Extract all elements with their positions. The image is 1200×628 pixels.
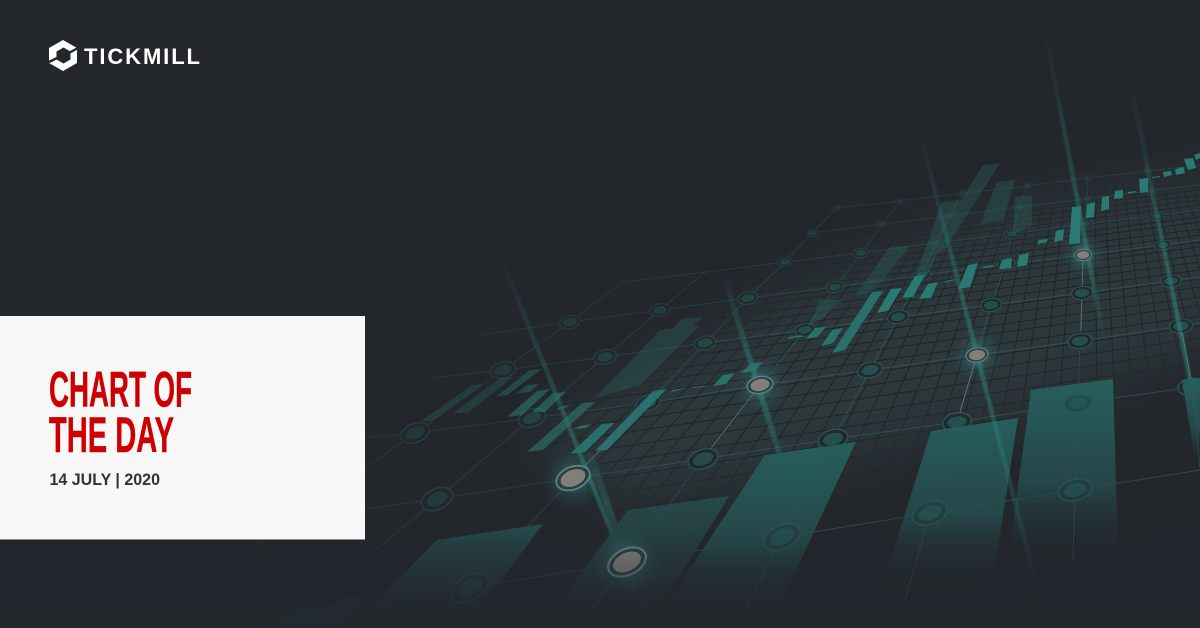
ghost candles [595,163,1032,398]
large foreground bars [240,378,1200,628]
nodes row E [558,239,1171,331]
logo wordmark: TICKMILL [84,44,200,69]
nodes row B [418,377,1200,515]
column and row lines [349,164,1200,614]
middle candles [570,291,883,454]
beam over bars [918,125,1040,600]
candlesticks [420,153,1200,454]
nodes row D [488,274,1182,381]
glowing nodes [539,231,1107,600]
heading: THE DAY [49,407,174,463]
nodes upper rows [777,167,1164,268]
network of grid lines and nodes [349,164,1200,614]
logo icon: hexagon [49,40,77,71]
nodes row C [398,318,1193,447]
heading: CHART OF [49,362,192,418]
bottom fade [0,530,1200,628]
faded left candles [420,377,513,422]
heading [49,362,192,463]
right candles [877,288,902,313]
nodes row A [278,475,1094,628]
lit grid panel [563,184,1200,494]
nodes seen through bars [446,392,1094,609]
light beams [500,30,1200,628]
logo [49,40,200,71]
date: 14 JULY | 2020 [50,471,160,489]
title panel [0,316,365,540]
highlighted lines [573,255,1192,610]
